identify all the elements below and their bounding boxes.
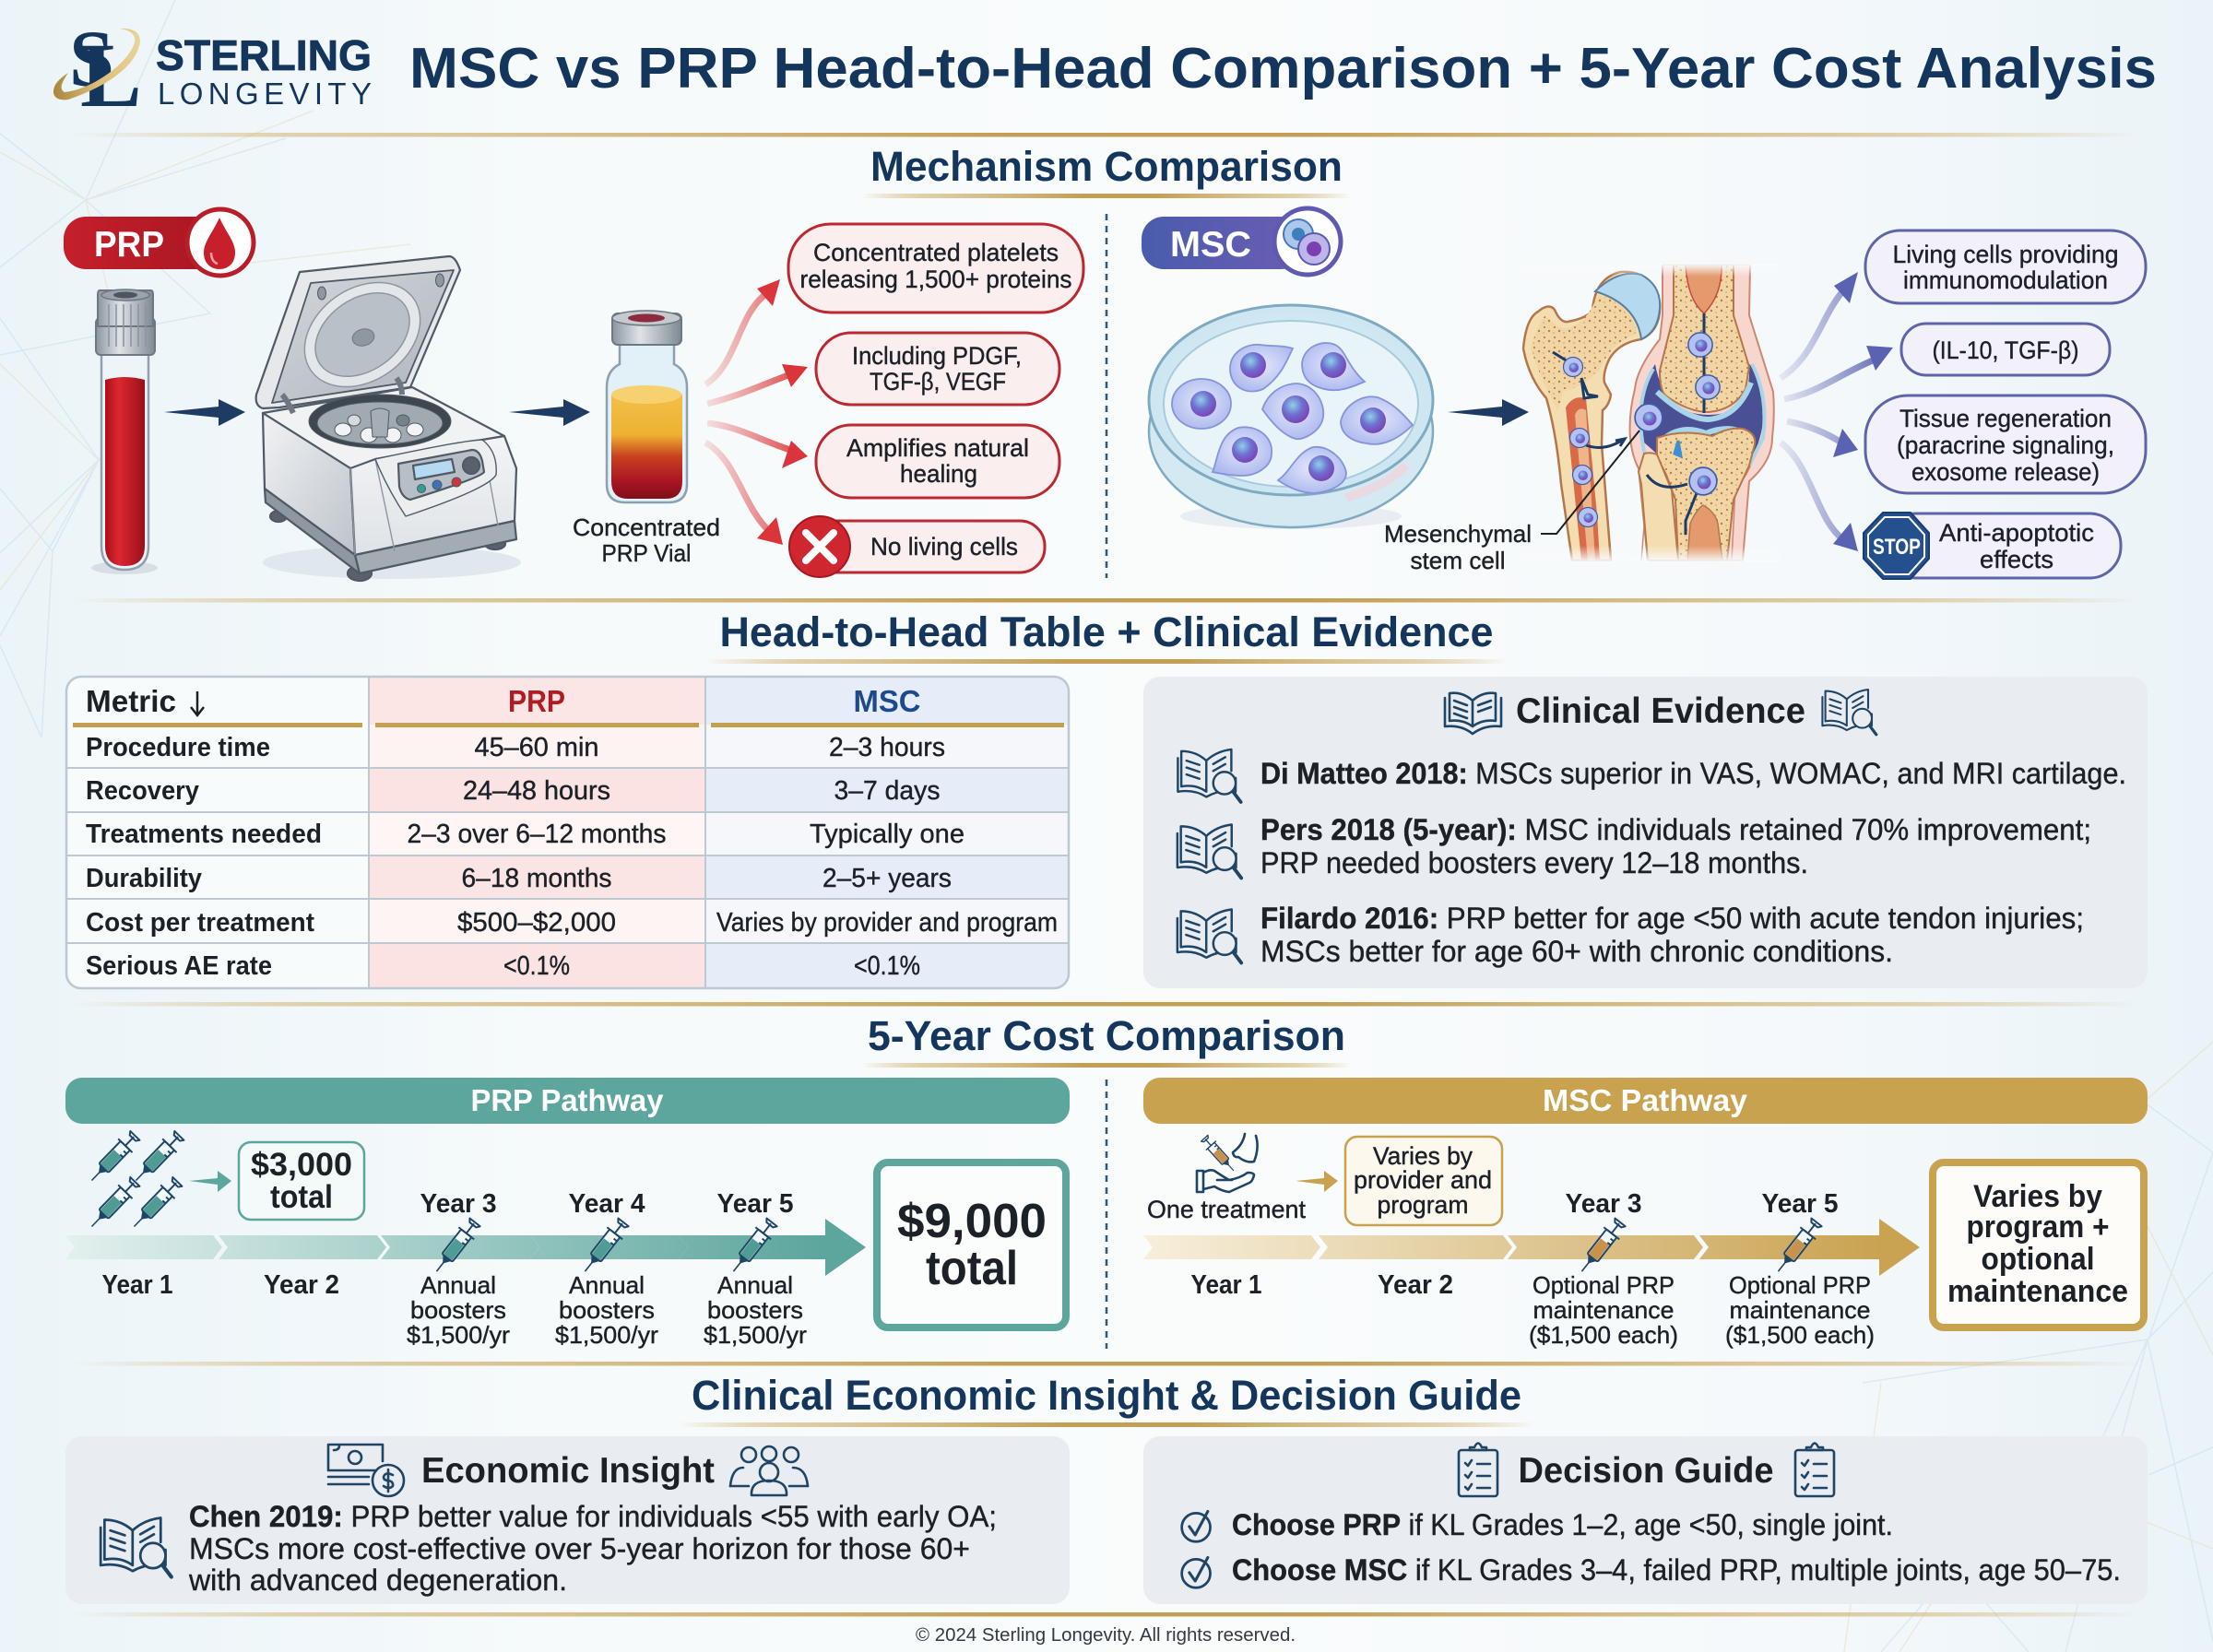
- booster notes: boosters: [707, 1296, 803, 1324]
- table MSC values: [716, 733, 1058, 981]
- syringes on timeline: [429, 1216, 779, 1278]
- arrow: to $3,000: [189, 1171, 231, 1192]
- year labels top: [420, 1189, 793, 1219]
- timeline arrow: [65, 1219, 866, 1276]
- box: Varies by provider and program: provider and: [1354, 1166, 1492, 1194]
- booster notes: boosters: [410, 1296, 506, 1324]
- booster notes: Annual: [420, 1271, 496, 1299]
- evidence: Di Matteo 2018: Di Matteo 2018: MSCs superior in VAS, WOMAC, and MRI cartilage.: [1260, 757, 2126, 790]
- maintenance notes: [1529, 1271, 1875, 1349]
- panel: Decision Guide: [1143, 1436, 2148, 1604]
- table PRP values: $500–$2,000: [457, 908, 616, 938]
- logo mark: L: [80, 24, 142, 126]
- evidence: Filardo 2016: MSCs better for age 60+ with chronic conditions.: [1260, 935, 1893, 968]
- icon: concentrated PRP vial: [607, 311, 687, 502]
- MSC badge: [1142, 208, 1341, 275]
- heading: Clinical Evidence: Clinical Evidence: [1516, 691, 1805, 731]
- callout: Living cells: Living cells providing: [1892, 241, 2119, 268]
- callout: Living cells: [1865, 230, 2146, 303]
- booster notes: Annual: [717, 1271, 793, 1299]
- table row labels: Treatments needed: [86, 820, 322, 849]
- panel: Economic Insight: [65, 1436, 1070, 1604]
- callout: Anti-apoptotic effects: STOP: [1873, 535, 1921, 560]
- box: Varies by program + optional maintenance: [1933, 1162, 2144, 1328]
- arrow: to varies box: [1296, 1171, 1338, 1192]
- maintenance notes: ($1,500 each): [1725, 1321, 1875, 1349]
- icon: centrifuge: [256, 256, 521, 581]
- lid: [256, 256, 460, 408]
- callout: Including PDGF: [816, 333, 1059, 405]
- label: Mesenchymal stem cell: stem cell: [1411, 547, 1505, 574]
- arrows: vial to benefits: [705, 279, 808, 545]
- section heading: 5-Year Cost Comparison: 5-Year Cost Comparison: [868, 1012, 1345, 1059]
- syringes on timeline: [1574, 1216, 1824, 1278]
- icon: book with magnifier: [1822, 690, 1876, 735]
- evidence: Pers 2018: PRP needed boosters every 12–18 months.: [1260, 846, 1808, 879]
- logo wordmark: STERLING: [156, 31, 372, 79]
- box: Varies by program + optional maintenance: Varies by: [1973, 1179, 2102, 1214]
- caption: Concentrated PRP Vial: PRP Vial: [601, 539, 692, 567]
- table header: [86, 684, 920, 718]
- callout: IL-10 TGF-beta: (IL-10, TGF-β): [1933, 336, 2078, 364]
- icon: open book: [1445, 693, 1501, 734]
- label: Mesenchymal stem cell: [1384, 431, 1639, 574]
- box: $9,000 total: total: [926, 1242, 1018, 1295]
- callout: Anti-apoptotic effects: Anti-apoptotic: [1939, 519, 2094, 547]
- table row labels: Durability: [86, 864, 202, 893]
- MSC pathway header: MSC Pathway: [1543, 1083, 1748, 1117]
- callout: Amplifies natural healing: [816, 425, 1059, 498]
- title: MSC vs PRP Head-to-Head Comparison + 5-Year Cost Analysis: [409, 37, 2157, 100]
- callout: Concentrated platelets: [788, 224, 1083, 313]
- table PRP values: 45–60 min: [474, 733, 599, 762]
- icon: money: [328, 1445, 404, 1496]
- panel: Clinical Evidence: [1143, 677, 2148, 988]
- section heading: Mechanism Comparison: Mechanism Comparison: [870, 143, 1343, 190]
- table PRP values: <0.1%: [503, 951, 570, 981]
- table MSC values: <0.1%: [854, 951, 920, 981]
- booster notes: boosters: [559, 1296, 655, 1324]
- year labels bottom: [1191, 1270, 1453, 1300]
- icon: clipboard right: [1795, 1444, 1834, 1496]
- MSC pathway header: [1143, 1078, 2148, 1124]
- box: Varies by provider and program: [1345, 1137, 1502, 1225]
- callout: Anti-apoptotic effects: [1864, 513, 2121, 579]
- arrow: dish to joint: [1448, 399, 1529, 426]
- section heading: Head-to-Head Table + Clinical Evidence: Head-to-Head Table + Clinical Evidence: [719, 608, 1494, 655]
- table PRP values: 2–3 over 6–12 months: [408, 820, 666, 849]
- evidence: Di Matteo 2018: [1178, 749, 2126, 802]
- label: Mesenchymal stem cell: Mesenchymal: [1384, 520, 1532, 548]
- year labels bottom: Year 2: [1378, 1270, 1453, 1300]
- icon: book with magnifier: [101, 1517, 172, 1577]
- table MSC values: 2–3 hours: [829, 733, 945, 762]
- decision: choose PRP: Choose PRP if KL Grades 1–2, age <50, single joint.: [1232, 1508, 1893, 1541]
- text: Chen 2019: with advanced degeneration.: [188, 1564, 567, 1597]
- icon: femur and knee anatomy with stem cells: [1521, 264, 1780, 562]
- booster notes: $1,500/yr: [704, 1321, 807, 1349]
- table row labels: [86, 733, 322, 981]
- maintenance notes: ($1,500 each): [1529, 1321, 1678, 1349]
- table row labels: Cost per treatment: [86, 908, 314, 938]
- box: Varies by provider and program: program: [1378, 1191, 1468, 1219]
- table row labels: Serious AE rate: [86, 951, 272, 981]
- arrows: joint to effects: [1781, 272, 1893, 551]
- table header: Metric: [86, 684, 176, 718]
- maintenance notes: maintenance: [1730, 1296, 1870, 1324]
- callout: Concentrated platelets: Concentrated platelets: [813, 239, 1059, 266]
- box: $3,000 total: total: [270, 1179, 333, 1215]
- logo mark: [53, 15, 142, 126]
- panel: MSC pathway: [1143, 1078, 2148, 1349]
- table PRP values: 24–48 hours: [463, 776, 610, 806]
- callout: No living cells: [789, 516, 1045, 577]
- decision: choose MSC: Choose MSC if KL Grades 3–4, failed PRP, multiple joints, age 50–75.: [1232, 1553, 2121, 1587]
- heading: Economic Insight: Economic Insight: [421, 1451, 715, 1491]
- MSC badge: MSC: [1170, 225, 1251, 265]
- panel: PRP pathway: [65, 1078, 1070, 1349]
- year labels bottom: [101, 1270, 339, 1300]
- rotor bowl: [309, 395, 451, 448]
- evidence: Pers 2018: Pers 2018 (5-year): MSC individuals retained 70% improvement;: [1260, 813, 2091, 846]
- PRP pathway header: PRP Pathway: [470, 1083, 664, 1117]
- arrow: tube to centrifuge: [164, 399, 245, 426]
- table header: PRP: [508, 684, 565, 718]
- logo mark: S: [69, 15, 114, 104]
- label: One treatment: One treatment: [1147, 1196, 1306, 1223]
- timeline arrow: [1143, 1219, 1920, 1276]
- year labels bottom: Year 2: [264, 1270, 339, 1300]
- callout: Tissue regeneration: Tissue regeneration: [1899, 405, 2112, 432]
- callout: Concentrated platelets: releasing 1,500+ proteins: [800, 266, 1071, 293]
- caption: Concentrated PRP Vial: Concentrated: [573, 513, 720, 541]
- PRP badge: [64, 209, 254, 276]
- booster notes: $1,500/yr: [407, 1321, 510, 1349]
- callout: Tissue regeneration: (paracrine signaling,: [1897, 431, 2114, 459]
- evidence: Filardo 2016: Filardo 2016: PRP better for age <50 with acute tendon injuries;: [1260, 902, 2084, 935]
- box: Varies by provider and program: Varies by: [1373, 1142, 1473, 1170]
- callout: Tissue regeneration: [1865, 395, 2146, 493]
- panel: MSC mechanism: [1142, 208, 2146, 579]
- evidence: Pers 2018: [1178, 813, 2091, 879]
- maintenance notes: maintenance: [1533, 1296, 1675, 1324]
- text: Chen 2019: [188, 1500, 997, 1597]
- table row labels: Recovery: [86, 776, 199, 806]
- year labels top: Year 5: [717, 1189, 793, 1219]
- table header: MSC: [854, 684, 920, 718]
- table PRP values: [408, 733, 666, 981]
- icon: hand with syringe: [1197, 1134, 1258, 1192]
- heading: Decision Guide: Decision Guide: [1518, 1451, 1774, 1491]
- callout: Anti-apoptotic effects: effects: [1980, 546, 2053, 573]
- icon: people: [730, 1446, 808, 1495]
- PRP pathway header: [65, 1078, 1070, 1124]
- evidence: Filardo 2016: [1178, 902, 2084, 968]
- callout: IL-10 TGF-beta: [1901, 324, 2110, 375]
- box: Varies by program + optional maintenance: maintenance: [1947, 1274, 2128, 1309]
- table PRP values: 6–18 months: [461, 864, 612, 893]
- callout: No living cells: No living cells: [870, 533, 1018, 560]
- maintenance notes: Optional PRP: [1533, 1271, 1675, 1299]
- year labels top: Year 5: [1761, 1189, 1839, 1219]
- text: Chen 2019: Chen 2019: PRP better value for individuals <55 with early OA;: [189, 1500, 997, 1533]
- maintenance notes: Optional PRP: [1729, 1271, 1871, 1299]
- text: Chen 2019: MSCs more cost-effective over 5-year horizon for those 60+: [189, 1532, 970, 1565]
- icon: blood test tube: [91, 289, 158, 574]
- year labels bottom: Year 1: [101, 1270, 173, 1300]
- table: head-to-head comparison: [66, 677, 1069, 988]
- year labels top: Year 3: [1566, 1189, 1641, 1219]
- icon: petri dish with cells: [1149, 305, 1433, 529]
- knee joint: [1630, 265, 1774, 560]
- logo: Sterling Longevity: [53, 15, 372, 126]
- callout: Including PDGF: TGF-β, VEGF: [870, 368, 1006, 395]
- logo wordmark: [156, 31, 372, 111]
- callout: Amplifies natural healing: Amplifies natural: [846, 434, 1029, 462]
- callout: Amplifies natural healing: healing: [900, 460, 977, 488]
- table MSC values: Typically one: [810, 820, 964, 849]
- year labels bottom: Year 1: [1191, 1270, 1261, 1300]
- callout: Living cells: immunomodulation: [1903, 266, 2108, 294]
- icon: clipboard left: [1459, 1444, 1497, 1496]
- year labels top: Year 3: [420, 1189, 496, 1219]
- booster notes: $1,500/yr: [555, 1321, 658, 1349]
- icon: four syringes: [85, 1128, 186, 1233]
- box: $3,000 total: [239, 1142, 364, 1220]
- panel: PRP mechanism: [64, 209, 1083, 581]
- caption: Concentrated PRP Vial: [573, 513, 720, 567]
- table MSC values: 2–5+ years: [822, 864, 952, 893]
- control panel: [398, 450, 484, 500]
- callout: Including PDGF: Including PDGF,: [852, 342, 1022, 370]
- box: $3,000 total: $3,000: [251, 1147, 352, 1183]
- table row labels: Procedure time: [86, 733, 270, 762]
- body: [263, 387, 504, 468]
- arrow: centrifuge to vial: [509, 399, 590, 426]
- year labels top: [1566, 1189, 1839, 1219]
- booster notes: [407, 1271, 807, 1349]
- section heading: Clinical Economic Insight & Decision Guide: Clinical Economic Insight & Decision Guide: [692, 1372, 1521, 1419]
- box: Varies by program + optional maintenance: optional: [1981, 1242, 2095, 1277]
- table MSC values: 3–7 days: [834, 776, 941, 806]
- box: Varies by program + optional maintenance: program +: [1966, 1210, 2110, 1245]
- booster notes: Annual: [569, 1271, 645, 1299]
- femur bone: [1523, 272, 1660, 560]
- box: $9,000 total: $9,000: [897, 1195, 1047, 1248]
- logo wordmark: LONGEVITY: [158, 77, 372, 111]
- box: $9,000 total: [877, 1162, 1066, 1328]
- year labels top: Year 4: [568, 1189, 645, 1219]
- PRP badge: PRP: [94, 225, 164, 265]
- table MSC values: Varies by provider and program: [716, 908, 1058, 938]
- callout: Tissue regeneration: exosome release): [1911, 458, 2100, 486]
- footer copyright: © 2024 Sterling Longevity. All rights reserved.: [916, 1625, 1296, 1646]
